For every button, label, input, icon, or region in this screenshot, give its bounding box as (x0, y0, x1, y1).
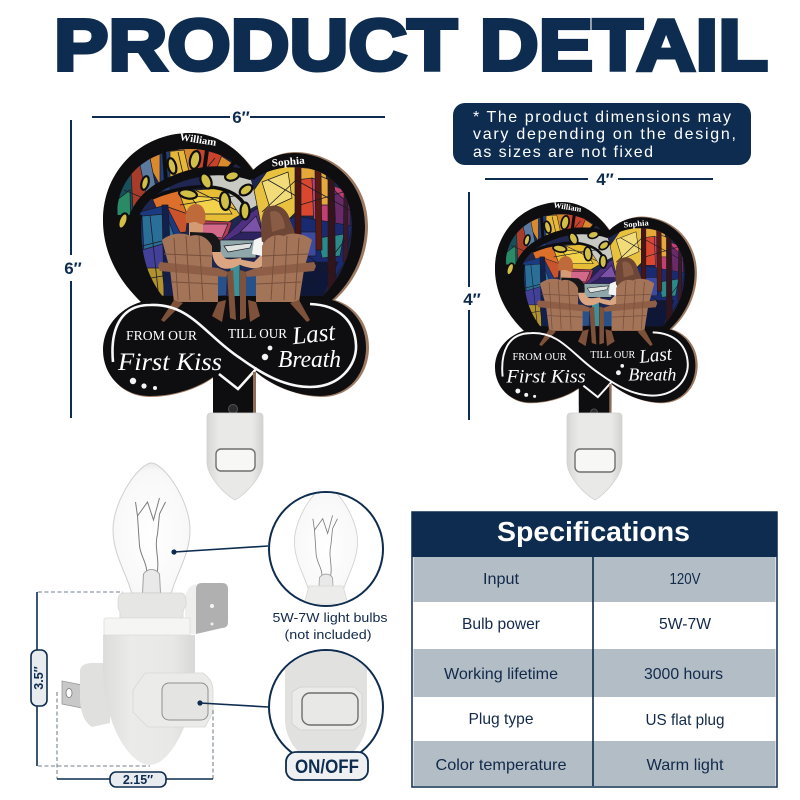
name labels (179, 132, 306, 169)
row: bulb power (462, 616, 712, 633)
row: color temperature (436, 757, 724, 774)
icon: bulb (113, 463, 190, 593)
small name labels: Sophia (623, 218, 649, 229)
dimension: small width: 4″ (596, 170, 614, 189)
row: working lifetime (444, 666, 723, 683)
small sign text: Breath (628, 364, 676, 384)
sign text: Breath (278, 347, 341, 373)
row: working lifetime: 3000 hours (644, 666, 723, 683)
sign text (117, 319, 341, 376)
small plug (567, 413, 622, 500)
small name labels: William (553, 200, 582, 214)
sign text: Last (290, 319, 338, 350)
small name labels (553, 200, 649, 229)
row: bulb power: Bulb power (462, 616, 541, 633)
row: input (483, 571, 701, 588)
name labels: Sophia (271, 155, 306, 169)
dimension: large height: 6″ (64, 259, 82, 278)
row bands (414, 557, 776, 786)
dimension: height 3.5: 3.5″ (32, 666, 46, 690)
sign text: TILL OUR (228, 326, 287, 341)
callout: on/off switch (197, 650, 383, 780)
bulb caption (272, 610, 388, 642)
callout: on/off switch: ON/OFF (295, 757, 359, 778)
title: PRODUCT DETAIL (54, 6, 768, 86)
small sign text: FROM OUR (513, 352, 567, 363)
dimension: width 2.15: 2.15″ (123, 773, 153, 787)
row: working lifetime: Working lifetime (444, 666, 558, 683)
plug base (80, 663, 110, 727)
note box: vary depending on the design, (473, 126, 736, 143)
small sign text (505, 344, 676, 388)
dimension: height 3.5 (31, 592, 150, 766)
bulb caption: (not included) (284, 627, 372, 642)
row: plug type: US flat plug (646, 712, 724, 729)
sign text: FROM OUR (126, 328, 197, 343)
plug (207, 413, 263, 500)
small sign text: First Kiss (505, 367, 586, 388)
collar (118, 593, 186, 618)
row: color temperature: Color temperature (436, 757, 567, 774)
row: plug type: Plug type (468, 711, 534, 728)
note box: * The product dimensions may (473, 109, 731, 126)
switch plate (133, 673, 213, 727)
sign text: First Kiss (117, 349, 222, 376)
bulb caption: 5W-7W light bulbs (272, 610, 388, 625)
note box: as sizes are not fixed (473, 144, 653, 161)
body (103, 635, 195, 765)
table header (412, 512, 777, 557)
exploded night light with bulb (62, 463, 228, 765)
product: large night light (103, 132, 369, 500)
small sign text: Last (637, 344, 674, 368)
dimension: small height: 4″ (463, 290, 481, 309)
note box (453, 103, 751, 165)
dimension: large width: 6″ (232, 108, 250, 127)
row: input: 120V (670, 571, 701, 588)
small sign text: TILL OUR (590, 350, 635, 361)
row: bulb power: 5W-7W (659, 616, 712, 633)
bracket (185, 583, 228, 634)
row: color temperature: Warm light (646, 757, 724, 774)
dimension: width 2.15 (57, 692, 213, 787)
rocker (162, 683, 208, 720)
flange (104, 618, 190, 635)
specifications table (412, 512, 777, 787)
row: input: Input (483, 571, 520, 588)
plug blade (62, 681, 82, 708)
row: plug type (468, 711, 724, 729)
table header: Specifications (497, 516, 690, 547)
name labels: William (179, 132, 217, 149)
product: small night light (495, 200, 698, 500)
callout: bulb (171, 487, 383, 606)
